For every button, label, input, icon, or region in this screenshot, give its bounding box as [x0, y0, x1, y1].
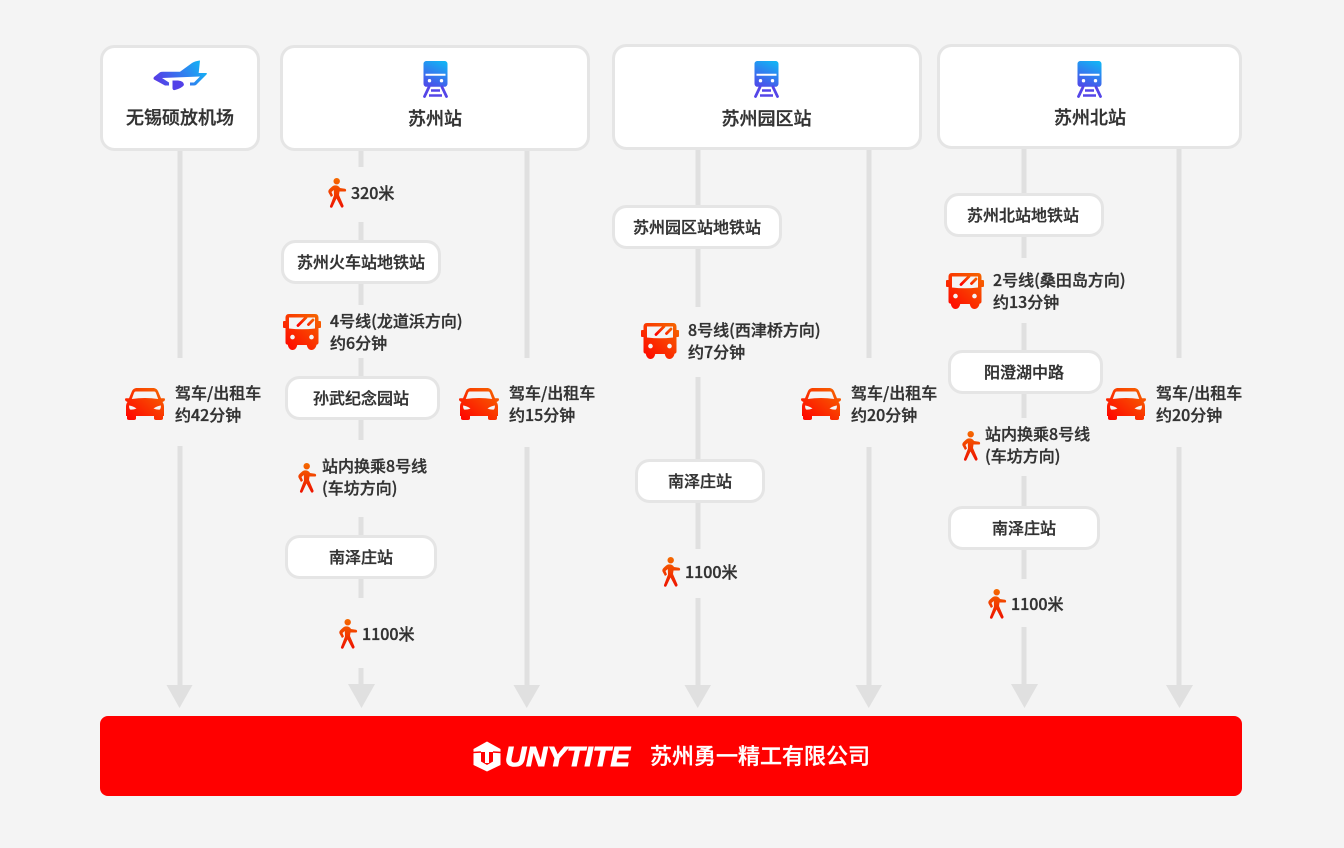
- step: walk 320m: [328, 178, 394, 208]
- destination banner: [100, 716, 1242, 796]
- route: Suzhou North station driving line: [1166, 148, 1193, 708]
- stop: Sunwu Memorial Park: 孙武纪念园站: [313, 385, 409, 409]
- stop: Yangchenghu Middle Road: [950, 352, 1102, 392]
- step: transfer to line 8: [962, 421, 1090, 467]
- company name: 苏州勇一精工有限公司: [650, 739, 870, 771]
- step: transfer to line 8: (车坊方向): [985, 443, 1060, 467]
- route: Suzhou Industrial Park station driving line: [856, 149, 882, 708]
- step: walk 1100m: [662, 557, 737, 587]
- step: Industrial Park station drive: 约20分钟: [851, 402, 917, 426]
- step: transfer to line 8: (车坊方向): [322, 475, 397, 499]
- step: walk 320m: 320米: [351, 180, 394, 204]
- logo wordmark: UNYTITE: [505, 741, 631, 772]
- panel: Suzhou Industrial Park station: [614, 46, 920, 148]
- step: airport drive: 约42分钟: [175, 402, 241, 426]
- panel: Suzhou station: [282, 46, 588, 150]
- stop: Nanzezhuang: 南泽庄站: [668, 468, 732, 492]
- heading: Suzhou North station: 苏州北站: [1054, 104, 1126, 130]
- heading: Suzhou station: 苏州站: [408, 105, 462, 131]
- stop: Suzhou railway station metro: 苏州火车站地铁站: [297, 249, 425, 273]
- step: Suzhou station drive: 驾车/出租车: [509, 380, 595, 404]
- step: Industrial Park station drive: 驾车/出租车: [851, 380, 937, 404]
- route: Suzhou station driving line: [514, 150, 540, 708]
- step: transfer to line 8: 站内换乘8号线: [985, 421, 1090, 445]
- icon: airplane: [154, 60, 207, 90]
- step: North station drive: 驾车/出租车: [1156, 380, 1242, 404]
- stop: Suzhou railway station metro: [282, 242, 440, 282]
- step: line 8: [641, 317, 821, 363]
- step: line 2: 约13分钟: [993, 289, 1059, 313]
- step: line 8: 8号线(西津桥方向): [688, 317, 821, 341]
- step: transfer to line 8: [298, 453, 427, 499]
- step: line 4: 约6分钟: [330, 330, 387, 354]
- step: airport drive: [125, 380, 261, 426]
- stop: Yangchenghu Middle Road: 阳澄湖中路: [984, 359, 1064, 383]
- step: North station drive: [1106, 380, 1242, 426]
- route: Suzhou station metro line: [348, 150, 375, 708]
- icon: train: [424, 61, 448, 96]
- step: Industrial Park station drive: [801, 380, 937, 426]
- stop: Sunwu Memorial Park: [286, 378, 438, 418]
- step: line 8: 约7分钟: [688, 339, 745, 363]
- step: Suzhou station drive: 约15分钟: [509, 402, 575, 426]
- step: Suzhou station drive: [459, 380, 595, 426]
- icon: train: [754, 61, 778, 96]
- stop: Suzhou North metro: [946, 194, 1102, 236]
- route: airport driving line: [166, 150, 192, 708]
- heading: airport name: 无锡硕放机场: [126, 104, 234, 130]
- stop: Nanzezhuang: 南泽庄站: [992, 515, 1056, 539]
- step: walk 1100m: 1100米: [362, 621, 414, 645]
- step: line 2: 2号线(桑田岛方向): [993, 267, 1126, 291]
- step: walk 1100m: [988, 589, 1063, 619]
- step: walk 1100m: 1100米: [1011, 591, 1063, 615]
- icon: train: [1078, 61, 1102, 96]
- route: Suzhou North station metro line: [1011, 148, 1038, 708]
- step: transfer to line 8: 站内换乘8号线: [322, 453, 427, 477]
- stop: Nanzezhuang: 南泽庄站: [329, 544, 393, 568]
- panel: Suzhou North station: [938, 46, 1240, 148]
- step: line 2: [946, 267, 1126, 313]
- step: walk 1100m: 1100米: [685, 559, 737, 583]
- stop: Suzhou Industrial Park metro: [614, 206, 780, 248]
- stop: Suzhou North metro: 苏州北站地铁站: [967, 202, 1079, 226]
- route: Suzhou Industrial Park station metro line: [684, 149, 711, 708]
- stop: Nanzezhuang: [636, 460, 764, 502]
- stop: Suzhou Industrial Park metro: 苏州园区站地铁站: [633, 214, 761, 238]
- icon: Unytite logo mark: [473, 742, 501, 772]
- step: line 4: 4号线(龙道浜方向): [330, 308, 463, 332]
- stop: Nanzezhuang: [950, 508, 1098, 548]
- step: North station drive: 约20分钟: [1156, 402, 1222, 426]
- step: line 4: [283, 308, 463, 354]
- heading: Suzhou Industrial Park station: 苏州园区站: [722, 105, 812, 131]
- stop: Nanzezhuang: [286, 536, 436, 578]
- step: airport drive: 驾车/出租车: [175, 380, 261, 404]
- step: walk 1100m: [339, 619, 414, 649]
- panel: Wuxi Shuofang airport: [102, 46, 258, 150]
